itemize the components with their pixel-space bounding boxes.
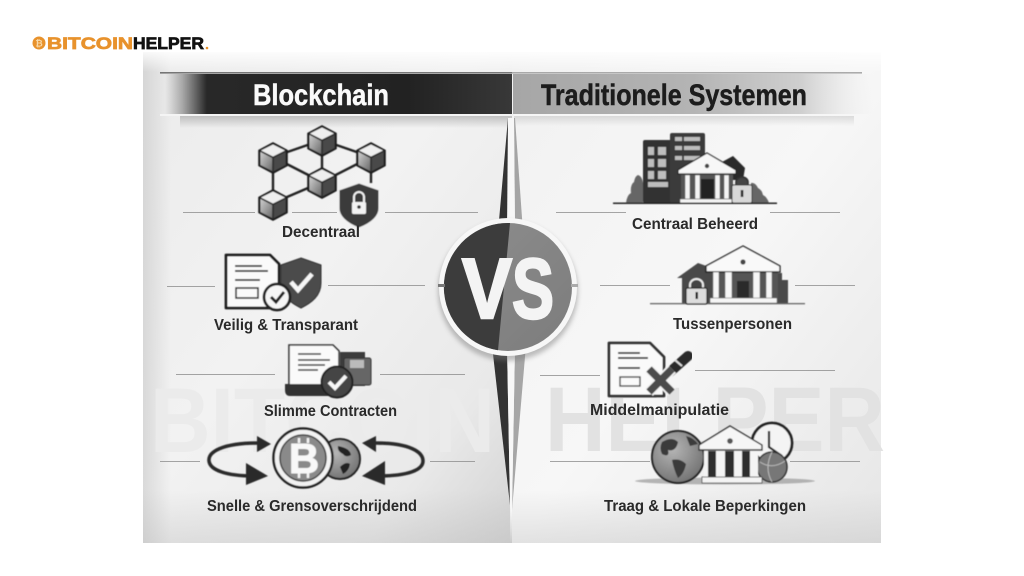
label: Tussenpersonen: Tussenpersonen — [673, 316, 792, 333]
label: Decentraal: Decentraal — [282, 224, 360, 241]
watermark: HELPER — [545, 369, 885, 471]
icon: manipulated document — [609, 343, 688, 396]
header: Traditionele Systemen — [512, 72, 873, 126]
header: Blockchain: Blockchain — [253, 79, 389, 112]
icon: smart contract — [285, 345, 371, 398]
header: Blockchain — [160, 72, 512, 128]
watermark: BITCOIN — [150, 370, 495, 472]
panel: Blockchain background — [143, 52, 512, 543]
icon: bank with lock — [650, 246, 805, 304]
icon: central buildings, bank and lock — [613, 133, 777, 204]
header: Traditionele Systemen: Traditionele Systemen — [541, 79, 807, 112]
left edge vignette — [143, 52, 171, 543]
label: Slimme Contracten: Slimme Contracten — [264, 403, 397, 420]
divider spikes — [492, 118, 526, 543]
watermark — [150, 369, 885, 472]
icon: blockchain network with shield — [259, 126, 385, 228]
bottom edge vignette — [143, 490, 881, 543]
label: Traag & Lokale Beperkingen: Traag & Lokale Beperkingen — [604, 498, 806, 515]
label: Middelmanipulatie: Middelmanipulatie — [590, 402, 729, 419]
logo: Bitcoin Helper: HELPER — [133, 35, 204, 53]
label: Snelle & Grensoverschrijdend: Snelle & Grensoverschrijdend — [207, 498, 417, 515]
icon: Bitcoin, globe and arrows — [209, 428, 423, 488]
icon: Bitcoin, globe and arrows: B — [289, 435, 319, 482]
label: Veilig & Transparant: Veilig & Transparant — [214, 317, 358, 334]
icon: document with shield and check — [226, 255, 321, 310]
panel: Traditionele Systemen background — [512, 52, 881, 543]
logo: Bitcoin Helper: BITCOIN — [47, 35, 133, 53]
top highlight — [143, 52, 881, 72]
VS badge — [438, 218, 578, 361]
logo: Bitcoin Helper — [32, 35, 208, 53]
VS badge: V — [462, 242, 512, 337]
logo: Bitcoin Helper: ₿ — [35, 38, 43, 48]
section lines — [160, 212, 860, 462]
VS badge: S — [512, 242, 554, 337]
label: Centraal Beheerd: Centraal Beheerd — [632, 216, 758, 233]
icon: globe, bank and clock — [635, 423, 815, 484]
